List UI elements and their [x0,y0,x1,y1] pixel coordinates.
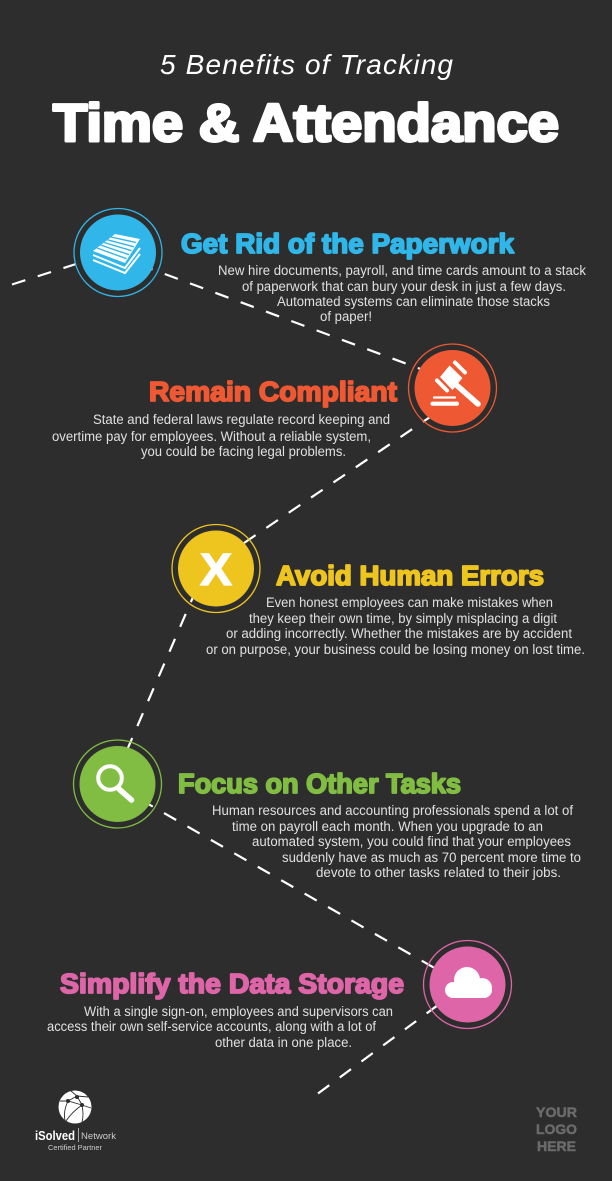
title: 5 Benefits of Tracking [160,49,453,80]
text block: automated system, you could find that your employees [252,834,571,849]
heading: Simplify the Data Storage [60,968,404,999]
your logo here placeholder: YOUR [536,1104,577,1120]
title: Time & Attendance [53,94,559,153]
text block: of paperwork that can bury your desk in just a few days. [242,279,566,294]
text block: other data in one place. [215,1035,352,1050]
heading: Remain Compliant [149,376,397,407]
text block: Human resources and accounting professionals spend a lot of [212,803,573,818]
text block: Even honest employees can make mistakes when [266,595,553,610]
isolved network logo: Network [81,1131,116,1142]
text block: devote to other tasks related to their jobs. [316,865,561,880]
icon: x mark [172,524,260,612]
text block: suddenly have as much as 70 percent more time to [282,850,581,865]
text block: State and federal laws regulate record keeping and [93,412,390,427]
title [53,49,559,153]
text block [218,263,586,324]
text block: With a single sign-on, employees and supervisors can [84,1004,393,1019]
icon: x mark: X [200,544,232,595]
panel: simplify the data storage [47,940,512,1050]
panel: focus on other tasks [74,740,581,880]
panel: remain compliant [52,344,496,459]
icon: cloud [424,940,512,1028]
text block [212,803,581,880]
isolved network logo [35,1090,116,1152]
text block: you could be facing legal problems. [141,444,346,459]
dashed connector path [12,264,438,1094]
your logo here placeholder: LOGO [536,1121,577,1137]
heading: Avoid Human Errors [276,560,544,591]
text block: they keep their own time, by simply misplacing a digit [249,611,557,626]
panel: avoid human errors [172,524,585,657]
text block: of paper! [320,309,372,324]
isolved network logo: iSolved [35,1128,75,1143]
text block [206,595,585,657]
text block: or adding incorrectly. Whether the mistakes are by accident [226,626,572,641]
icon: gavel [408,344,496,432]
heading: Get Rid of the Paperwork [181,228,515,259]
text block: or on purpose, your business could be losing money on lost time. [206,642,585,657]
text block: overtime pay for employees. Without a reliable system, [52,429,371,444]
heading: Focus on Other Tasks [178,768,461,799]
text block [52,412,390,459]
icon: magnifying glass [74,740,162,828]
icon: paper stack [74,208,162,296]
text block: Automated systems can eliminate those stacks [277,294,550,309]
your logo here placeholder [536,1104,577,1154]
text block: time on payroll each month. When you upgrade to an [232,819,543,834]
text block [47,1004,393,1050]
icon: globe [58,1090,92,1124]
your logo here placeholder: HERE [537,1138,576,1154]
text block: access their own self-service accounts, along with a lot of [47,1019,376,1034]
text block: New hire documents, payroll, and time cards amount to a stack [218,263,586,278]
panel: get rid of the paperwork [74,208,586,324]
isolved network logo: Certified Partner [48,1145,103,1152]
